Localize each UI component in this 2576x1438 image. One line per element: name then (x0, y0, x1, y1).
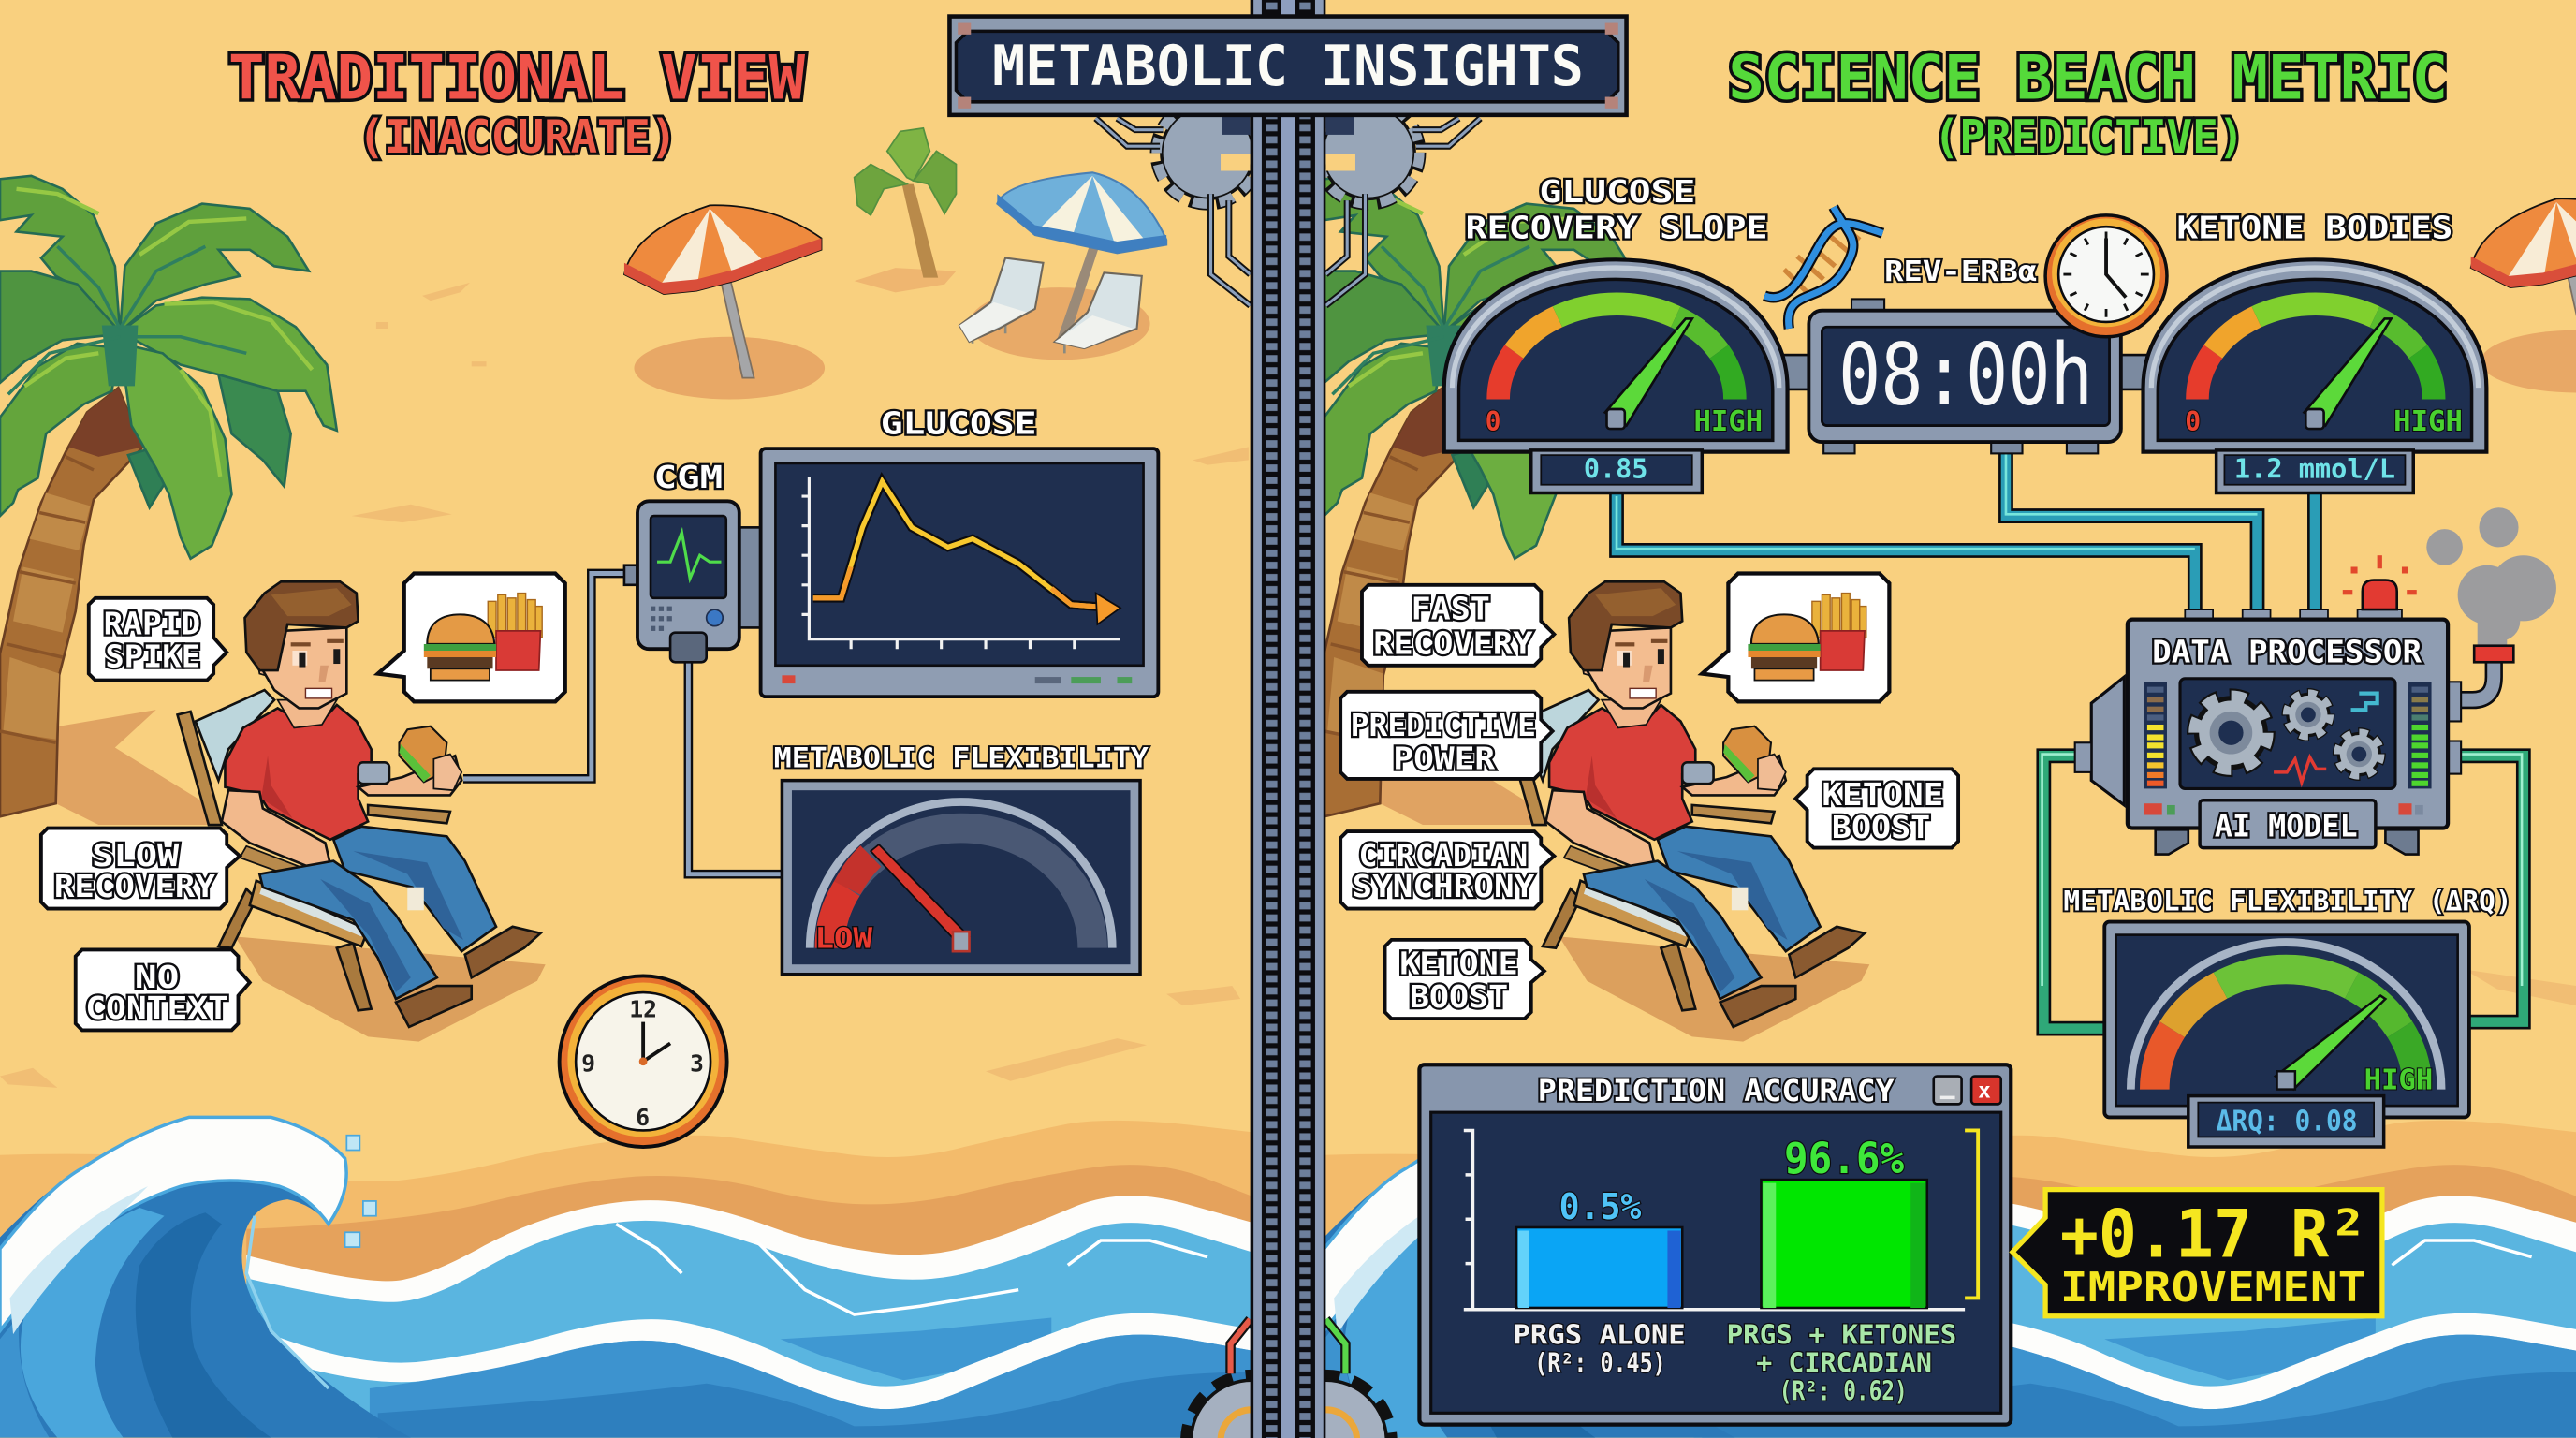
low metabolic flexibility gauge (782, 781, 1140, 975)
heading: traditional view: TRADITIONAL VIEW (228, 43, 806, 113)
analog clock: left: 6 (636, 1104, 650, 1131)
label: PRGS plus ketones plus circadian: PRGS + KETONES (1727, 1320, 1956, 1351)
improvement bracket (1965, 1130, 1978, 1298)
callout: ketone boost right: BOOST (1832, 809, 1930, 845)
small distant palm (855, 128, 956, 292)
person on chair: right panel (1501, 581, 1869, 1042)
label: AI model: AI MODEL (2215, 807, 2358, 844)
shoreline and waves: right panel (1325, 1117, 2576, 1438)
label: glucose recovery slope: GLUCOSE (1540, 173, 1695, 210)
food speech bubble: left (378, 574, 565, 701)
bar: PRGS plus ketones plus circadian (1761, 1180, 1927, 1308)
high metabolic flexibility gauge (2104, 922, 2469, 1147)
beach umbrella: right edge (2471, 198, 2576, 392)
high metabolic flexibility gauge: HIGH (2364, 1064, 2433, 1097)
callout: slow recovery: SLOW (92, 837, 180, 873)
gauge: ketone bodies: 1.2 mmol/L (2234, 454, 2395, 485)
callout: circadian synchrony: SYNCHRONY (1352, 868, 1534, 904)
callout: ketone boost right: KETONE (1822, 776, 1943, 813)
callout: rapid spike (89, 598, 227, 681)
callout: rapid spike: SPIKE (105, 638, 200, 675)
label: glucose recovery slope: RECOVERY SLOPE (1466, 209, 1767, 245)
panel: prediction accuracy (1419, 1064, 2011, 1425)
CGM device (624, 501, 761, 662)
analog clock: right (2045, 215, 2167, 337)
bottom gears and cables at pillar base (1188, 1319, 1390, 1438)
callout: predictive power (1340, 692, 1553, 779)
callout: predictive power: POWER (1393, 740, 1496, 776)
gauge low label: LOW (815, 923, 872, 956)
analog clock: left (560, 976, 727, 1147)
green feedback pipes (2042, 755, 2524, 1029)
callout: fast recovery: FAST (1412, 591, 1490, 627)
gauge: glucose recovery slope (1444, 259, 1788, 493)
smoke from processor (2426, 507, 2556, 649)
data processor (2075, 609, 2461, 855)
gauge: ketone bodies: 0 (2185, 406, 2201, 437)
bar chart axes (1464, 1130, 1965, 1310)
bar value 96.6%: 96.6% (1784, 1134, 1905, 1183)
central pillar (1251, 0, 1325, 1438)
analog clock: left: 9 (581, 1049, 595, 1077)
gauge: ketone bodies: HIGH (2393, 405, 2463, 438)
gauge: glucose recovery slope: 0 (1486, 406, 1501, 437)
callout: circadian synchrony: CIRCADIAN (1358, 837, 1528, 873)
callout: no context: NO (135, 959, 179, 995)
subheading: predictive: (PREDICTIVE) (1934, 110, 2244, 164)
label: PRGS alone: (R²: 0.45) (1534, 1347, 1666, 1378)
window buttons: x (1978, 1078, 1991, 1103)
callout: R squared improvement: +0.17 R² (2060, 1196, 2367, 1273)
exhaust pipe (2448, 646, 2513, 700)
label: CGM: CGM (654, 459, 723, 495)
shoreline and waves: left panel (0, 1117, 1251, 1438)
callout: no context (76, 949, 250, 1030)
callout: ketone boost right (1795, 769, 1958, 848)
callout: ketone boost left: KETONE (1399, 946, 1518, 982)
title sign (949, 17, 1627, 115)
label: rev-erb alpha: REV-ERBα (1884, 256, 2037, 288)
callout: no context: CONTEXT (85, 990, 228, 1026)
gauge: ketone bodies (2144, 259, 2486, 493)
teal data pipes (1617, 447, 2315, 614)
callout: ketone boost left (1385, 940, 1544, 1019)
callout: slow recovery: RECOVERY (54, 868, 215, 904)
label: PRGS plus ketones plus circadian: (R²: 0.62) (1779, 1375, 1908, 1406)
label: PRGS plus ketones plus circadian: + CIRCADIAN (1756, 1347, 1932, 1378)
label: glucose recovery slope (1466, 173, 1767, 245)
icon: DNA helix (1764, 207, 1882, 329)
glucose monitor line chart (761, 448, 1158, 697)
analog clock: left: 3 (690, 1049, 704, 1077)
label: PRGS alone: PRGS ALONE (1513, 1320, 1686, 1351)
panel title: PREDICTION ACCURACY (1538, 1075, 1895, 1108)
digital clock: 08:00h: 08:00h (1838, 325, 2093, 425)
cables: left panel (463, 574, 782, 874)
callout: rapid spike: RAPID (104, 605, 200, 641)
beach umbrella and two loungers (959, 172, 1166, 360)
beach umbrella: orange (624, 205, 825, 399)
value: delta RQ: ΔRQ: 0.08 (2217, 1105, 2358, 1137)
label: metabolic flexibility left: METABOLIC FLEXIBILITY (774, 742, 1149, 774)
bar: PRGS alone (1516, 1227, 1682, 1308)
sand texture marks (0, 283, 2576, 1088)
gears and wiring behind the sign (1096, 102, 1480, 305)
gauge: glucose recovery slope: HIGH (1694, 405, 1763, 438)
callout: predictive power: PREDICTIVE (1351, 707, 1536, 743)
digital clock: 08:00h (1808, 299, 2121, 453)
callout: R squared improvement: IMPROVEMENT (2060, 1264, 2365, 1312)
heading: science beach metric: SCIENCE BEACH METRIC (1728, 43, 2448, 113)
label: metabolic flexibility delta RQ: METABOLIC FLEXIBILITY (ΔRQ) (2063, 885, 2512, 917)
label: ketone bodies: KETONE BODIES (2177, 209, 2452, 245)
label: PRGS plus ketones plus circadian (1727, 1320, 1956, 1406)
callout: R squared improvement (2012, 1190, 2382, 1316)
subheading: inaccurate: (INACCURATE) (359, 110, 677, 164)
callout: circadian synchrony (1340, 831, 1554, 909)
title text: METABOLIC INSIGHTS (992, 35, 1584, 99)
analog clock: left: 12 (629, 995, 657, 1022)
palm tree: right panel (1325, 178, 1627, 825)
callout: fast recovery (1362, 585, 1554, 666)
connector bars between gauges and clock (1773, 355, 2159, 389)
callout: slow recovery (41, 829, 240, 909)
label: glucose: GLUCOSE (881, 404, 1036, 441)
gauge: glucose recovery slope: 0.85 (1584, 454, 1647, 485)
window buttons (1934, 1077, 2001, 1104)
food speech bubble: right (1702, 574, 1889, 701)
callout: fast recovery: RECOVERY (1373, 625, 1533, 662)
label: PRGS alone (1513, 1320, 1686, 1378)
alarm beacon (2343, 555, 2417, 620)
callout: ketone boost left: BOOST (1410, 978, 1508, 1015)
label: data processor: DATA PROCESSOR (2152, 633, 2422, 669)
person on chair: left panel (178, 581, 546, 1042)
palm tree: left panel (0, 176, 337, 825)
bar value 0.5%: 0.5% (1559, 1186, 1641, 1228)
